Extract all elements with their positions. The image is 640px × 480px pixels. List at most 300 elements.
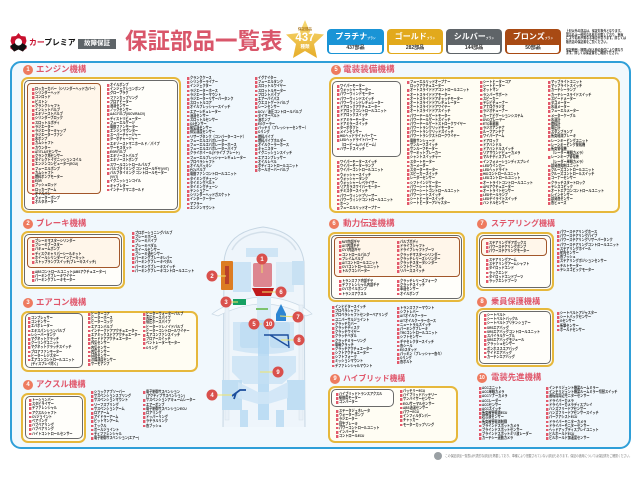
- parts list: ACCレーダー: [482, 398, 501, 403]
- parts list: ステアリングアームシャフト: [489, 261, 529, 266]
- parts list: A/T内部ギヤ: [342, 243, 360, 248]
- parts list: クラッチスタータシンダー: [400, 260, 437, 265]
- parts list: プッシュロッド: [35, 182, 57, 187]
- parts list: ロアアーム: [94, 410, 109, 415]
- parts list: クラッチレリーズシリンダー: [400, 256, 440, 261]
- parts list: ブロアースイッチ: [146, 336, 171, 341]
- parts list: 排気温度センサー: [190, 129, 215, 134]
- parts list: [557, 230, 619, 272]
- parts list: ドアロックコントロールユニット: [340, 108, 387, 113]
- parts list: ヒーターソレノイドバルブ: [146, 324, 183, 329]
- parts list: パワーステアリングポンプ: [489, 244, 526, 249]
- parts list: パワーテールゲートモーター: [410, 112, 450, 118]
- parts list: （レーダー単眼カメラ）: [551, 159, 585, 164]
- parts list: PCVバルブ: [190, 167, 206, 172]
- parts list: タイミングベルト: [190, 180, 215, 185]
- parts list: フューエルタンク: [258, 79, 283, 84]
- parts list: 水温計: [551, 117, 560, 122]
- parts list: ACCソナーカメラ: [482, 393, 507, 398]
- parts list: [337, 159, 393, 210]
- parts list: A/Tオイルクーラー: [400, 313, 427, 318]
- parts list: コンバーター: [339, 399, 358, 404]
- parts list: オイルクーラーホース: [258, 142, 289, 147]
- parts list: オルタネーター: [35, 199, 57, 204]
- parts list: ホールドセンサー: [560, 327, 585, 332]
- brake unit: [221, 261, 233, 290]
- parts list: ブレーキパイプ: [135, 238, 157, 243]
- parts list: ドアロックスイッチ: [340, 112, 368, 117]
- parts list: スーパーチャージャー: [110, 132, 141, 137]
- parts list: エンジンコンピューター(ECU): [35, 161, 78, 166]
- parts list: 衝突被害軽減制御: [482, 418, 507, 424]
- parts list: 水温メーター: [551, 104, 570, 109]
- heading: 動力伝達機構: [343, 218, 395, 228]
- parts list: EGスタッド: [400, 347, 417, 352]
- parts list: [397, 239, 440, 273]
- parts list: コーナーセンサー: [551, 175, 576, 180]
- parts list: ロッカーアーム: [35, 186, 56, 192]
- plan notes: 部品名は一般的な名称を記載しており、車両: [566, 33, 623, 37]
- parts list: 超音波センサー: [482, 414, 504, 419]
- parts list: シフトフォーク: [335, 354, 357, 359]
- parts list: ターボチャージャー: [110, 136, 138, 141]
- parts list: 日射センサー: [91, 353, 110, 358]
- parts list: ABS油温センサー: [403, 405, 428, 410]
- parts list: SRSエアバッグ: [487, 325, 509, 330]
- parts list: ワイパーモーターランプ: [340, 163, 374, 168]
- parts list: サスペンションアーム: [94, 406, 125, 411]
- parts list: スロットルセンサー: [190, 117, 218, 122]
- parts list: オートスライドドアコントロールユニット: [410, 87, 469, 92]
- parts list: [339, 239, 379, 273]
- parts list: 衝突被害軽減ECU: [482, 410, 507, 415]
- parts list: TRCコントロールユニット: [400, 330, 438, 335]
- parts list: ウエストゲートバルブ: [258, 100, 289, 105]
- parts list: Oリング: [400, 355, 412, 360]
- parts list: スピーカー: [483, 96, 499, 101]
- panel: 8 occupant protection: [476, 296, 626, 368]
- parts list: ステアリングアーム: [489, 257, 517, 262]
- parts list: EGRバルブ: [110, 149, 126, 154]
- parts list: カーナビゲーションシステム: [483, 112, 523, 118]
- parts list: 誤発進センサー: [551, 196, 573, 201]
- parts list: ドライバーモニターカメラ: [549, 418, 586, 424]
- parts list: タイマーベルト: [258, 113, 280, 118]
- parts list: ギヤセレクタースイッチ: [400, 338, 434, 344]
- parts list: オットマン: [483, 87, 499, 92]
- parts list: 低圧ホースパイプ: [146, 319, 171, 324]
- parts list: Oリング: [146, 344, 158, 350]
- parts list: エアコンバルブ: [91, 324, 113, 329]
- parts list: シフトインジケーター: [410, 180, 441, 184]
- star badge: 437 parts: 保証部品: [298, 27, 312, 31]
- heading: 乗員保護機構: [491, 297, 540, 306]
- parts list: 水ポンプ: [35, 136, 47, 141]
- parts list: オートスライドドアスイッチ: [410, 108, 450, 113]
- parts list: フロントパイプ: [258, 92, 280, 97]
- parts list: ラジエーター: [339, 416, 358, 421]
- parts list: AACバルブ(ISCV/RACV): [110, 111, 145, 116]
- parts list: [143, 311, 190, 350]
- parts list: オイルポンプ: [110, 82, 129, 87]
- parts list: ハイトコントロールセンサー: [32, 430, 72, 436]
- parts list: ラジオチューナー: [483, 108, 508, 113]
- parts list: ロックアクチュエーター: [410, 83, 444, 88]
- parts list: 各ボルト: [400, 359, 412, 364]
- parts list: カムシャフト: [35, 170, 54, 175]
- parts list: (アクティブサスペンション): [146, 393, 185, 398]
- parts list: スピーカースイッチ: [410, 171, 438, 176]
- parts list: クラッチスイッチ: [400, 282, 425, 287]
- parts list: プロペラシャフトセンターベアリング: [335, 312, 388, 317]
- logo text: カープレミア: [29, 38, 76, 47]
- engine: [253, 263, 272, 287]
- parts list: ドアロックアクチュエーター: [340, 104, 380, 109]
- parts list: コンデンサー: [31, 319, 50, 324]
- parts list: ディストリビューター: [110, 116, 141, 120]
- plan: silver: [446, 29, 502, 54]
- parts list: クラッチスタートロック: [551, 180, 585, 184]
- parts list: ボールジョイント: [94, 427, 119, 432]
- parts list: ブラインドスポットミリ波レーダー: [482, 431, 532, 436]
- parts list: ブロアヒーター: [110, 99, 132, 104]
- number badge 8: 8: [480, 299, 484, 305]
- parts list: シフトケーブル: [400, 264, 422, 269]
- parts list: SRSエアバッグコントロールユニット: [487, 329, 540, 334]
- parts list: クランク角センサー: [35, 153, 63, 158]
- parts list: バルブボディ: [400, 239, 418, 244]
- parts list: パッキン（プレッシャー各々）: [400, 351, 444, 356]
- parts list: ワイパーアーム: [483, 133, 504, 138]
- parts list: スロットルボディ: [35, 120, 60, 124]
- parts list: ラテラルリンク: [146, 418, 168, 423]
- parts list: 内気センサー: [91, 349, 110, 354]
- parts list: [88, 311, 141, 366]
- parts list: プロペラシャフト: [335, 308, 360, 313]
- icon: logo wheel: [10, 33, 27, 52]
- callout numbers: 9: [276, 370, 280, 376]
- parts list: [397, 278, 437, 296]
- parts list: パワーステアリングコントロールユニット: [560, 242, 619, 247]
- footer disclaimer: [433, 452, 632, 461]
- parts list: カーテシースライドスイッチ: [551, 92, 591, 97]
- parts list: ラジエーターマウント: [190, 92, 221, 97]
- plan: gold: 282部品: [406, 45, 424, 51]
- parts list: イグナイター: [258, 75, 277, 80]
- parts list: クルーズコントロールスイッチ: [551, 171, 594, 176]
- parts list: ベントレーターモーター: [146, 340, 180, 345]
- parts list: リアサウンドビューカメラ: [483, 150, 520, 155]
- parts list: HIDヘッドライトバーナー: [340, 133, 377, 138]
- star badge: 437 parts: [286, 20, 324, 58]
- car body: [223, 227, 305, 430]
- parts list: [143, 389, 196, 428]
- parts list: キャブレター: [110, 182, 129, 188]
- car diagram with numbered callouts: [206, 226, 312, 427]
- parts list: CVT内部ギヤ: [342, 247, 361, 252]
- plan: silver: 144部品: [465, 45, 483, 51]
- parts list: [557, 311, 597, 332]
- number badge 8: [477, 297, 487, 307]
- parts list: ワイパーモータースイッチ: [340, 159, 377, 164]
- parts list: [32, 86, 97, 196]
- number badge 6: [329, 219, 339, 229]
- plan notes: ます。詳しくは保証書をご確認ください。: [566, 51, 620, 55]
- parts list: エキゾーストポンプ: [110, 157, 138, 162]
- parts list: シフトアクチュエーター: [335, 350, 369, 355]
- parts list: ウォッシャータンク: [340, 176, 368, 181]
- parts list: パワートランクリッドスイッチ: [410, 129, 454, 134]
- parts list: パワートランクストロークワイヤー: [410, 133, 460, 138]
- parts list: [486, 241, 529, 254]
- parts list: ピットマンアーム: [94, 418, 119, 423]
- parts list: ドッパーリング: [146, 414, 168, 419]
- parts list: [187, 75, 246, 210]
- parts list: コンロッド: [35, 94, 51, 99]
- parts list: 油温センサー: [190, 113, 209, 118]
- parts list: レシーバータンク: [31, 332, 56, 337]
- parts list: パワーテールゲートスイッチ: [410, 117, 450, 122]
- parts list: （ロービーム/ハイビーム）: [340, 142, 378, 147]
- parts list: ヒーターウォーターバルブ: [146, 311, 183, 316]
- parts list: 油ポンプ: [258, 117, 270, 122]
- parts list: スタビライザー: [32, 401, 54, 406]
- parts list: A/Tコントロールユニット: [342, 260, 378, 265]
- parts list: タイミングチェーン: [190, 184, 218, 189]
- parts list: [255, 75, 308, 172]
- parts list: シートヒーターコア: [483, 79, 511, 84]
- parts list: ウォッシャーモーター: [340, 87, 371, 92]
- parts list: パワーウィンドコントロールユニット: [340, 197, 393, 202]
- plan: platinum: プラチナプラン: [335, 32, 376, 41]
- parts list: ドアロック: [483, 138, 499, 143]
- parts list: スピードメーター: [551, 96, 576, 101]
- parts list: ブレーキペダル: [135, 243, 157, 248]
- plan: bronze: ブロンズプラン: [513, 32, 553, 41]
- parts list: クーリングユニット: [31, 340, 59, 345]
- parts list: ECUサーマルセンサー: [403, 401, 435, 406]
- parts list: メーターケーブル: [551, 112, 576, 118]
- parts list: フューエルプレッシャーレギュレーター: [190, 155, 246, 160]
- parts list: クラッチミラーリング: [335, 338, 366, 342]
- parts list: パワーシートモーター: [410, 184, 441, 189]
- parts list: スロットルワイヤー: [258, 83, 286, 88]
- panel: 7 steering: [476, 218, 626, 292]
- parts list: ディスクキャリパーシールキット: [35, 251, 81, 256]
- steering unit: [276, 304, 286, 321]
- parts list: フューエルポンプ: [35, 166, 60, 171]
- parts list: ターボダクト: [340, 125, 359, 130]
- warranty badge: [78, 39, 116, 49]
- parts list: サイドエアバッグ: [487, 350, 512, 355]
- parts list: バッテリ（プレッシャーセンサー）: [258, 125, 308, 130]
- parts list: カーメーター: [410, 163, 429, 168]
- parts list: パワーシートスイッチ: [410, 192, 441, 197]
- parts list: パワーステアリングホース: [560, 229, 597, 234]
- parts list: マフラー: [190, 201, 202, 206]
- parts list: シフトレバー: [400, 309, 419, 314]
- parts list: ストップランプスイッチ(ブレーキスイッチ): [35, 259, 96, 264]
- parts list: グロープラグ: [110, 90, 129, 95]
- parts list: テレスコピックモーター: [560, 267, 594, 272]
- parts list: マップライトスイッチ: [551, 83, 582, 88]
- parts list: AT/TLA/Tセンサー: [35, 149, 61, 154]
- plan: bronze: [505, 29, 561, 54]
- parts list: インテリジェント橋梁ルームミラー切替スイッチ: [549, 389, 617, 394]
- parts list: ETC車載器: [483, 121, 499, 126]
- callout numbers: 7: [296, 315, 300, 321]
- parts list: ブレーキブースター: [35, 242, 63, 247]
- parts list: シートバックセンサー: [560, 314, 591, 319]
- parts list: ステアリングホイール: [560, 246, 591, 251]
- parts list: ハンドルセンサー: [483, 200, 508, 205]
- parts list: サーモアンプ: [91, 361, 110, 366]
- parts list: シートベルトアジャスター: [560, 310, 597, 315]
- panel: 1 engine: [21, 64, 308, 213]
- parts list: オートスライドドアワイヤー: [410, 104, 450, 109]
- parts list: エアーポンプ: [146, 402, 164, 407]
- parts list: ナックル: [94, 422, 106, 428]
- parts list: クラッチアクチュエーター: [335, 346, 372, 351]
- parts list: トランスファ内部ギヤ: [342, 278, 373, 283]
- parts list: クルーズコントロールユニット: [551, 167, 594, 172]
- parts list: エアコンファンスイッチ: [146, 332, 180, 337]
- parts list: ピストン: [35, 99, 47, 104]
- parts list: シリンダーライナー: [190, 79, 218, 84]
- parts list: 電動ファンモーター: [110, 124, 138, 129]
- parts list: シートベルト: [487, 312, 506, 317]
- parts list: ドライブシャフトブーツ: [400, 247, 434, 252]
- parts list: [480, 79, 533, 205]
- parts list: ホイールシリンダーインナーキット: [35, 255, 85, 260]
- parts list: クラッチマスターシリンダー: [400, 252, 440, 257]
- parts list: ハイブリッドトランスアクスル: [339, 391, 382, 396]
- parts list: シフトセンサー: [400, 334, 422, 339]
- parts list: 油温センサー: [110, 103, 129, 108]
- parts list: EGクーラー: [258, 121, 275, 126]
- number badge 3: 3: [26, 300, 30, 306]
- parts list: フューエルメーター: [551, 108, 579, 113]
- parts list: インテークドアアクチュエーター: [91, 328, 138, 333]
- parts list: デファレンシャル内部ギヤ: [342, 282, 379, 287]
- parts list: ラジエーターキャップ: [35, 128, 66, 133]
- parts list: タイロッドエンド: [489, 265, 514, 270]
- parts list: ラジオアンテナ: [483, 125, 505, 130]
- parts list: レーンキープ警報機: [551, 154, 579, 159]
- plan: gold: [387, 29, 443, 54]
- parts list: CVジョイント: [32, 414, 52, 419]
- parts list: ユニバーサルジョイント: [335, 317, 369, 322]
- parts list: ブロアファンモーター: [31, 348, 62, 354]
- parts list: シャントスイッチャー: [410, 154, 441, 159]
- number badge 1: 1: [26, 67, 30, 73]
- parts list: インフィルダンパー: [403, 413, 431, 418]
- panel: 3 air conditioner: [21, 297, 198, 372]
- parts list: シリンダーヘッド: [35, 90, 60, 95]
- parts list: ハブベアリング: [32, 426, 54, 431]
- heading: アクスル機構: [36, 379, 86, 389]
- parts list: パーキングブレーキスイッチ: [135, 264, 175, 268]
- parts list: AFSアクチュエーター: [483, 184, 514, 189]
- parts list: パワーウィンドモーター: [340, 91, 374, 96]
- parts list: キャニスター: [258, 146, 277, 151]
- parts list: パワーウィンドブリーザー: [340, 192, 377, 198]
- parts list: ドライバーモニターセンサー: [549, 423, 589, 428]
- parts list: [29, 397, 72, 436]
- chassis: [246, 248, 278, 257]
- parts list: 高圧ホースパイプ: [146, 315, 171, 320]
- parts list: フューエルリッドオープナー: [410, 79, 450, 84]
- parts list: LEDヘッドライト: [483, 167, 508, 172]
- parts list: テレビチューナー: [483, 100, 508, 105]
- air conditioner unit: [233, 299, 246, 305]
- parts list: レーンキーピングユニット: [551, 138, 588, 143]
- parts list: 電子制御サスペンションECU: [146, 406, 187, 411]
- parts list: ニュートラルスイッチ: [400, 322, 431, 327]
- parts list: ドアハンドルスイッチ: [483, 146, 514, 151]
- parts list: 各ヒューズ: [551, 200, 566, 205]
- heading: エンジン機構: [36, 64, 86, 74]
- parts list: テンショナー: [190, 188, 209, 193]
- parts list: ラジエーターファン: [35, 132, 63, 137]
- parts list: ランバーサポート: [483, 92, 508, 97]
- parts list: DVDプレーヤー: [483, 117, 505, 122]
- parts list: HIDコントロールユニット: [483, 171, 520, 176]
- parts list: 電子制御サスペンション(エアー): [94, 435, 139, 440]
- parts list: ラジエーターリザーバータンク: [190, 96, 234, 101]
- parts list: オイルパッキン: [190, 163, 212, 168]
- parts list: シートヒーターアジャスター: [410, 200, 450, 205]
- parts list: ボディコントロールユニット: [258, 163, 298, 168]
- parts list: [132, 230, 194, 273]
- parts list: ACCユニット: [482, 385, 501, 390]
- parts list: インバーター: [339, 429, 358, 434]
- parts list: トランスアクスル: [342, 291, 367, 296]
- number badge 4: 4: [26, 382, 30, 388]
- parts list: LEDテールランプ: [483, 192, 508, 197]
- parts list: フレイムバルブ: [342, 256, 364, 261]
- parts list: パワーテールゲートストロークワイヤー: [410, 121, 466, 126]
- parts list: 電動ファンコントロールユニット: [190, 171, 237, 176]
- parts list: ドライバーカメラ: [549, 398, 574, 403]
- parts list: インジェクションポンプ: [110, 86, 144, 91]
- parts list: オイルレベル: [258, 159, 277, 164]
- plan: bronze: 50部品: [525, 45, 541, 51]
- parts list: ドアハンドル: [483, 142, 502, 147]
- parts list: パーキングブレーキコントロールユニット: [135, 268, 194, 273]
- parts list: CVTオイルポンプ: [342, 286, 367, 291]
- parts list: 電動サンシェード: [410, 138, 435, 143]
- parts list: シートヒーター: [483, 83, 505, 88]
- parts list: 運転席周辺モニターセンサー: [549, 393, 590, 398]
- parts list: [548, 79, 604, 205]
- parts list: パワートランクリッドモーター: [410, 125, 454, 130]
- parts list: サンルーフスイッチ: [410, 142, 438, 147]
- parts list: クラッチカバー: [335, 321, 357, 326]
- parts list: スタートモーター: [410, 159, 435, 164]
- parts list: (ディスプレイ除く): [31, 361, 58, 366]
- number badge 10: [477, 373, 487, 383]
- parts list: [107, 82, 169, 192]
- parts list: ラックエンド: [489, 270, 508, 275]
- parts list: LEDコントロールユニット: [483, 175, 520, 180]
- parts list: ダイレクトイグニッションコイル: [35, 157, 82, 162]
- parts list: ステアリングギアボックス: [489, 240, 526, 245]
- parts list: ショックアブソーバー: [94, 389, 125, 394]
- parts list: ロッカーカバー（シリンダーヘッドカバー）: [35, 86, 97, 91]
- parts list: ステータジェネレータ: [339, 408, 370, 413]
- panel: 6 power train: [328, 218, 465, 368]
